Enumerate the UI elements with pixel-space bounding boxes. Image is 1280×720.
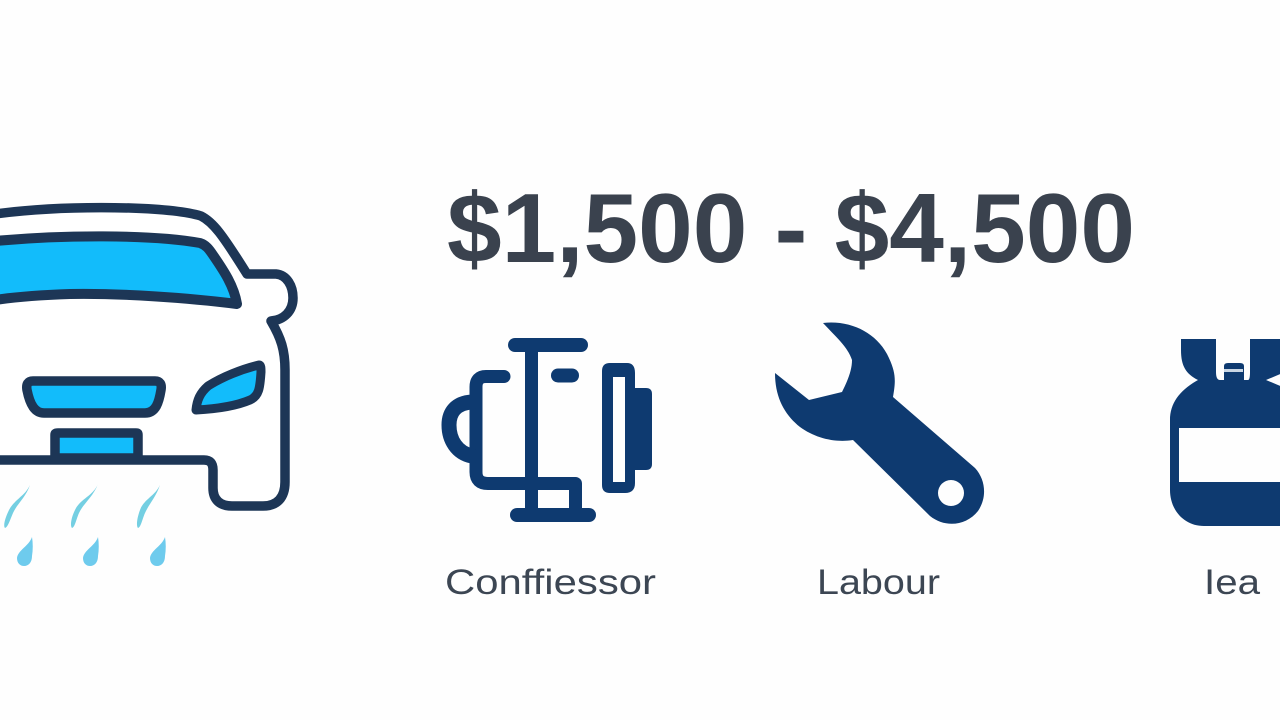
label: refrigerant: Iea bbox=[1204, 563, 1261, 602]
price range heading: $1,500 - $4,500 bbox=[447, 173, 1135, 283]
windshield bbox=[0, 236, 237, 304]
grille bbox=[27, 381, 161, 413]
lower intake bbox=[55, 433, 138, 458]
icon: compressor bbox=[449, 345, 652, 515]
compressor pulley bbox=[602, 363, 652, 493]
valve highlight and right notch bbox=[1224, 369, 1243, 372]
label: labour: Labour bbox=[817, 563, 940, 602]
label: compressor: Conffiessor bbox=[445, 563, 656, 602]
car body outline bbox=[0, 208, 293, 506]
water drops bbox=[17, 537, 166, 566]
icon: car with water drops bbox=[0, 208, 293, 566]
icon: wrench bbox=[775, 323, 984, 524]
water streaks bbox=[4, 484, 160, 528]
tank body bbox=[1170, 339, 1280, 526]
headlight bbox=[196, 365, 261, 410]
icon: refrigerant tank bbox=[1170, 339, 1280, 526]
